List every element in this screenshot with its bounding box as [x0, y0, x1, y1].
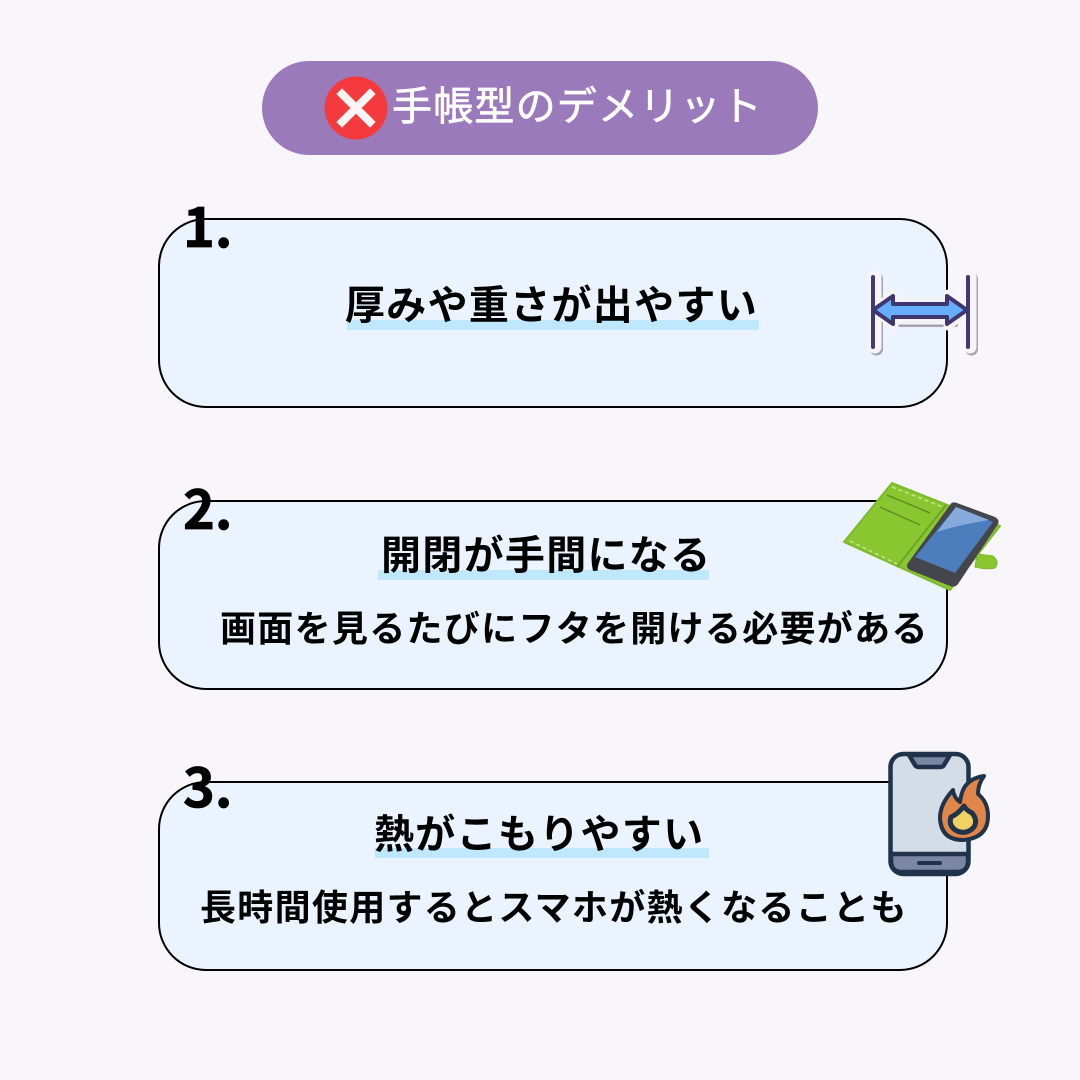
icon: red cross: [324, 76, 388, 140]
title pill: [262, 61, 818, 155]
number 3: 3.: [183, 744, 232, 823]
card 2 background: [158, 500, 948, 690]
number 2: 2.: [183, 466, 232, 545]
heading highlight 2: [378, 570, 709, 580]
body text 3: 長時間使用するとスマホが熱くなることも: [200, 887, 908, 928]
panel: item 1: [158, 184, 978, 408]
heading 3: 熱がこもりやすい: [374, 813, 704, 857]
title text: 手帳型のデメリット: [392, 85, 763, 129]
panel: item 2: [158, 466, 1001, 690]
heading 1: 厚みや重さが出やすい: [345, 284, 758, 328]
card 1 background: [158, 218, 948, 408]
icon: green flip case phone: [843, 482, 1001, 591]
panel: item 3: [158, 744, 990, 971]
icon: width arrows: [868, 270, 978, 356]
body text 2: 画面を見るたびにフタを開ける必要がある: [220, 608, 929, 649]
heading highlight 1: [347, 320, 759, 330]
icon: overheating phone: [888, 752, 990, 876]
card 3 background: [158, 780, 948, 970]
heading highlight 3: [375, 848, 709, 858]
number 1: 1.: [183, 184, 232, 263]
heading 2: 開閉が手間になる: [381, 534, 711, 578]
